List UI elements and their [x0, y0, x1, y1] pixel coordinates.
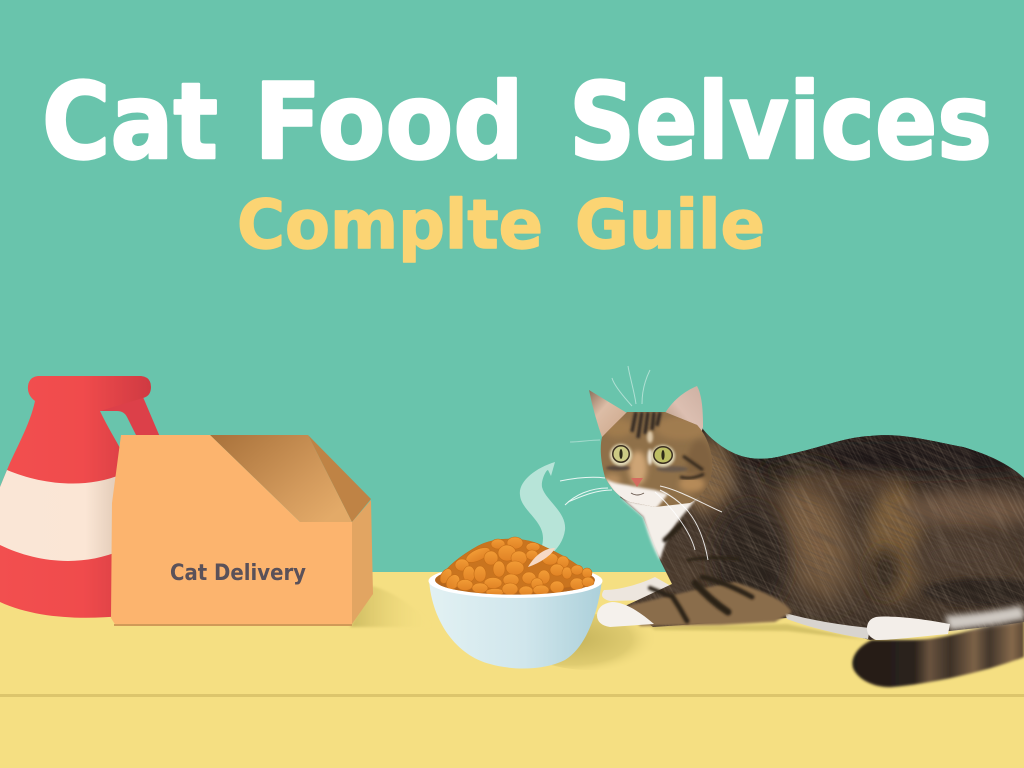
box shadow on table	[350, 586, 432, 627]
bowl front rim	[430, 581, 601, 596]
icon: steam wisp	[520, 462, 565, 567]
cat stripes	[650, 524, 752, 621]
bowl body	[429, 580, 602, 669]
title: Food	[254, 61, 524, 183]
bowl shadow	[522, 614, 658, 670]
cat nose	[631, 478, 643, 487]
box label: Cat Delivery	[170, 561, 306, 586]
cat shadow on table	[650, 624, 867, 640]
icon: delivery box	[111, 435, 373, 626]
cat mouth	[631, 493, 644, 495]
cat hind paw	[867, 617, 950, 640]
background wall	[0, 0, 1024, 572]
title	[42, 61, 992, 183]
title: Cat	[42, 61, 218, 183]
cat	[560, 366, 1024, 687]
bowl opening	[435, 565, 595, 595]
cat right ear	[662, 386, 703, 437]
cat eyes	[610, 444, 675, 467]
cat front paw	[597, 602, 654, 627]
subtitle: Guile	[575, 186, 765, 265]
steam base glint	[528, 548, 555, 567]
cat hind leg white	[945, 606, 1024, 630]
cat belly white	[785, 613, 870, 639]
cat head	[600, 412, 712, 507]
kibble pile	[438, 537, 594, 596]
icon: red food jug	[0, 376, 160, 618]
subtitle	[237, 186, 765, 265]
cat back paw	[602, 577, 678, 601]
cat chest bib	[620, 497, 697, 560]
bowl with kibble	[428, 537, 602, 669]
table surface	[0, 572, 1024, 768]
bowl rim	[428, 564, 602, 598]
cat fur markings	[621, 429, 1024, 640]
cat left ear	[589, 390, 632, 440]
cat tail	[852, 618, 1024, 687]
cat body	[620, 425, 1024, 640]
subtitle: Complte	[237, 186, 543, 265]
cat whiskers	[560, 366, 722, 560]
cat front leg	[627, 582, 792, 626]
